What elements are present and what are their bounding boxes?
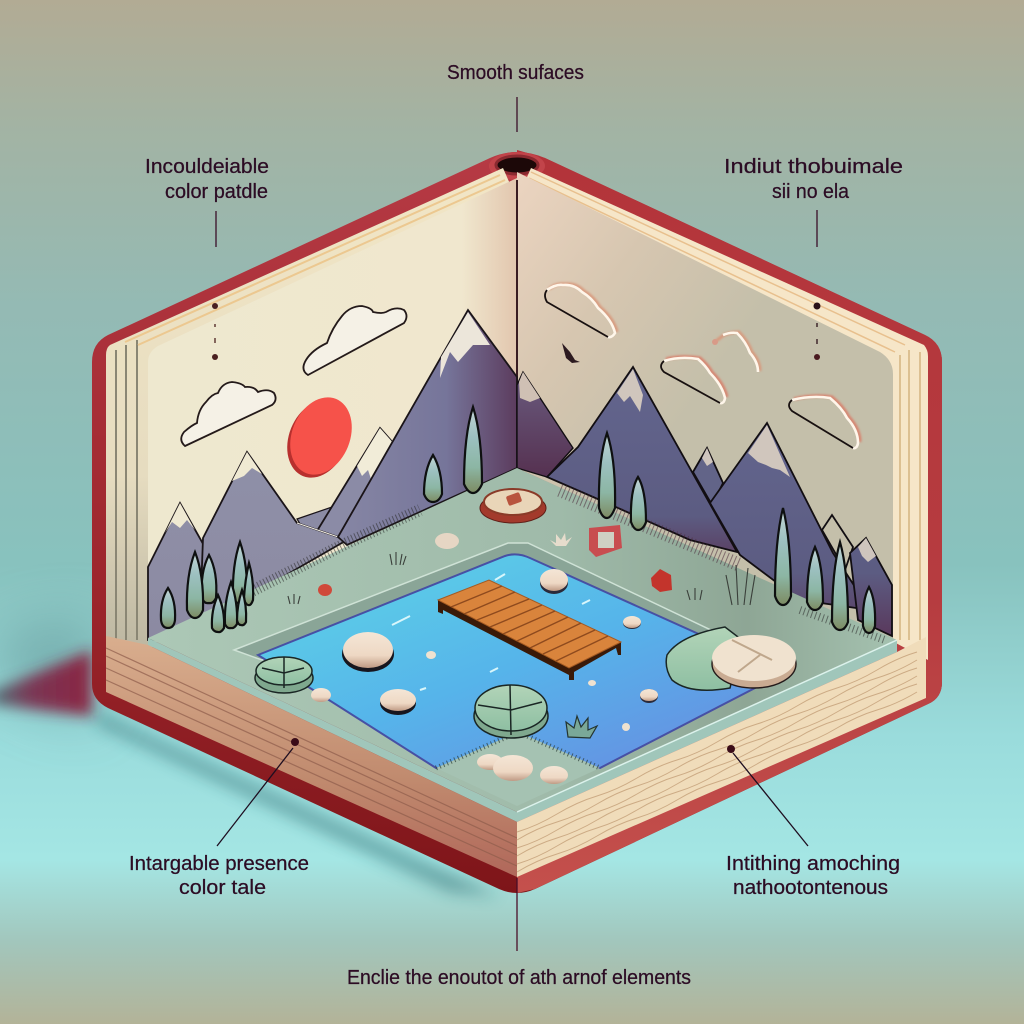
page edges left fan xyxy=(106,168,517,680)
page block left xyxy=(106,636,517,877)
pond water xyxy=(258,554,790,768)
cloud C xyxy=(712,332,760,372)
cloud A xyxy=(545,284,617,337)
stones in water xyxy=(311,569,658,731)
right lily xyxy=(666,627,742,690)
callout upper right xyxy=(724,156,903,360)
trees xyxy=(161,407,875,633)
small floor items xyxy=(318,533,672,596)
right mountain four xyxy=(710,423,870,610)
callout bottom: Enclie the enoutot of ath arnof elements xyxy=(347,967,691,989)
grass tufts xyxy=(288,552,755,605)
cover right side xyxy=(517,150,942,893)
center lily xyxy=(474,685,548,738)
floor front rim xyxy=(148,638,897,822)
callout top xyxy=(447,62,584,132)
callout lower right: nathootontenous xyxy=(733,877,888,899)
callout upper left: Incouldeiable xyxy=(145,156,269,178)
callout upper left: color patdle xyxy=(165,181,268,203)
birds xyxy=(231,343,580,513)
grass fringe at mountains foot xyxy=(240,490,885,640)
callout upper left xyxy=(145,156,269,360)
page edges right fan xyxy=(517,168,928,660)
lily pads xyxy=(255,627,742,738)
succulent xyxy=(566,716,597,738)
clouds right wall xyxy=(545,284,860,448)
right wall page xyxy=(517,172,893,640)
corner mountain xyxy=(517,372,573,477)
small back hill xyxy=(297,507,345,542)
cast shadow of the book xyxy=(0,620,500,896)
cloud B xyxy=(661,357,727,403)
grass triangle xyxy=(436,732,600,806)
water highlights xyxy=(392,574,590,690)
callout lower left: color tale xyxy=(179,877,266,899)
bottom stones xyxy=(477,754,568,784)
large mountain xyxy=(338,310,517,545)
red block xyxy=(589,525,622,557)
coaster xyxy=(480,489,546,523)
right mountain six xyxy=(850,538,892,636)
callout lower left xyxy=(129,738,309,899)
callout upper right: Indiut thobuimale xyxy=(724,156,903,178)
cover spine hole xyxy=(489,152,545,180)
page block right xyxy=(517,637,926,877)
left wall page xyxy=(148,178,517,640)
callout lower right: Intithing amoching xyxy=(726,853,900,875)
left lily xyxy=(255,657,313,693)
big stone on lily xyxy=(712,635,796,688)
floor xyxy=(148,468,897,812)
mountains left wall xyxy=(148,310,517,640)
callout lower left: Intargable presence xyxy=(129,853,309,875)
wooden dock xyxy=(438,580,621,680)
small right peak xyxy=(822,515,853,570)
pond rim xyxy=(234,543,715,660)
middle mountain xyxy=(200,452,347,620)
sun xyxy=(276,388,363,487)
clouds left wall xyxy=(181,306,406,446)
small peak behind large xyxy=(317,428,395,538)
mountains right wall xyxy=(517,367,892,636)
small middle peak xyxy=(693,448,723,505)
cloud D xyxy=(789,396,860,448)
far-left mountain xyxy=(148,503,222,640)
callout lower right xyxy=(726,745,900,899)
callout upper right: sii no ela xyxy=(772,181,850,203)
right mountain two xyxy=(547,367,737,552)
callout top: Smooth sufaces xyxy=(447,62,584,84)
book cover xyxy=(92,152,942,893)
